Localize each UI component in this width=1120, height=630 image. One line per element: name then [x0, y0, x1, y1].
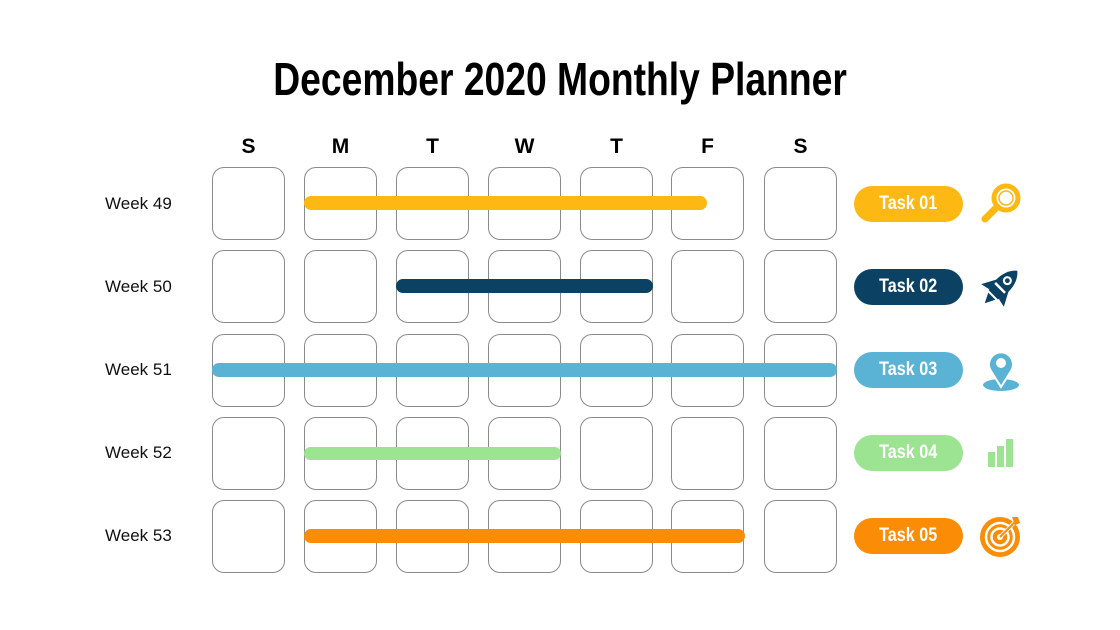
week labels [105, 194, 172, 545]
text: Week 51 [105, 360, 172, 379]
bar: task 05 [304, 529, 745, 543]
pill: task 02 [854, 269, 963, 305]
text: S [793, 135, 808, 158]
text: F [701, 135, 714, 158]
pill: task 03 [854, 352, 963, 388]
text: S [241, 135, 256, 158]
pill: task 02: Task 02 [879, 276, 938, 297]
pill: task 05 [854, 518, 963, 554]
text: T [610, 135, 623, 158]
text: Week 49 [105, 194, 172, 213]
title: December 2020 Monthly Planner [273, 53, 847, 105]
icon: target [980, 517, 1020, 557]
text: W [515, 135, 534, 158]
day headers [241, 135, 808, 158]
icon: bar chart [988, 439, 1013, 467]
text: Week 53 [105, 526, 172, 545]
bar: task 02 [396, 279, 653, 293]
bar: task 01 [304, 196, 707, 210]
icon: rocket [981, 270, 1018, 307]
icon: location pin [983, 353, 1019, 391]
text: M [332, 135, 349, 158]
bar: task 03 [212, 363, 837, 377]
text: T [426, 135, 439, 158]
text: Week 52 [105, 443, 172, 462]
icon: magnifier [982, 184, 1020, 222]
pill: task 03: Task 03 [879, 359, 938, 380]
pill: task 01: Task 01 [879, 193, 938, 214]
pill: task 05: Task 05 [879, 525, 938, 546]
calendar grid [212, 167, 1018, 573]
text: Week 50 [105, 277, 172, 296]
bar: task 04 [304, 447, 561, 460]
pill: task 04 [854, 435, 963, 471]
pill: task 01 [854, 186, 963, 222]
pill: task 04: Task 04 [879, 442, 938, 463]
